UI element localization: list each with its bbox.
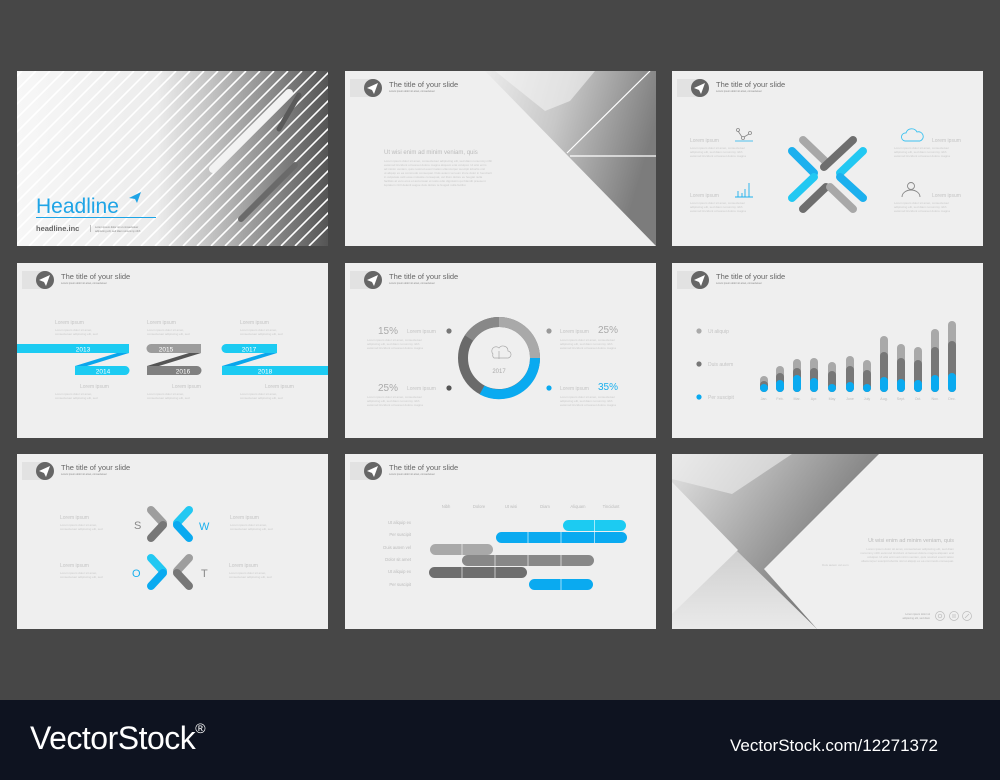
headline text: adipiscing elit, sed diam nonummy nibh [95,229,141,233]
header: Lorem ipsum dolor sit amet, consectetuer [389,90,435,93]
column labels: Aliquam [570,504,586,509]
column labels [442,504,620,509]
text blocks [690,138,961,213]
text blocks: Lorem ipsum dolor sit amet, [147,328,184,332]
legend: Per suscipit [708,395,734,401]
header: Lorem ipsum dolor sit amet, consectetuer [61,282,107,285]
column labels: Ut wisi [505,504,517,509]
text block: euismod tincidunt ut laoreet dolore magna aliquam erat volutpat. Ut wisi enim [384,163,487,167]
month labels: Oct. [915,397,921,401]
text blocks: Lorem ipsum [240,320,269,326]
footer bar: watermark: VectorStock® [30,720,205,756]
text block: luptatum zzril delenit augue duis dolore te feugait nulla facilisi. [384,183,466,187]
text blocks: consectetuer adipiscing elit, sed [55,332,98,336]
swot letters: T [201,568,208,580]
text blocks: Lorem ipsum [229,563,258,569]
text blocks: consectetuer adipiscing elit, sed [230,527,273,531]
text blocks: adipiscing elit, sed diam nonummy nibh [894,150,947,154]
header [350,462,458,480]
slide 8: gantt chart [345,454,656,629]
legend items: euismod tincidunt ut laoreet dolore magna [367,346,423,350]
month labels: June [846,397,854,401]
header [22,271,130,289]
legend items: adipiscing elit, sed diam nonummy nibh [560,342,613,346]
text blocks: euismod tincidunt ut laoreet dolore magna [894,154,950,158]
slide 7: SWOT [17,454,328,629]
text block: Duis autem vel eum [822,563,849,567]
row labels: Dolor sit amet [385,557,412,562]
text block: in vulputate velit esse molestie consequat, vel illum dolore eu feugiat nulla [384,175,483,179]
cross [792,140,863,209]
text blocks: Lorem ipsum [932,138,961,144]
slide 6: stacked bar chart [672,263,983,438]
header: Lorem ipsum dolor sit amet, consectetuer [389,473,435,476]
row labels: Per suscipit [389,532,412,537]
header: Lorem ipsum dolor sit amet, consectetuer [716,90,762,93]
text blocks: Lorem ipsum [690,138,719,144]
text blocks [60,515,273,579]
header: The title of your slide [716,272,785,281]
text blocks: consectetuer adipiscing elit, sed [147,396,190,400]
text blocks: euismod tincidunt ut laoreet dolore magna [894,209,950,213]
text block: Ut wisi enim ad minim veniam, quis [384,150,478,156]
donut [463,322,535,394]
text blocks: euismod tincidunt ut laoreet dolore magna [690,209,746,213]
text blocks: consectetuer adipiscing elit, sed [55,396,98,400]
legend items: Lorem ipsum [407,329,436,335]
slide 5: donut chart [345,263,656,438]
headline text [36,192,156,233]
text block: volutpat. Ut wisi enim ad minim veniam, quis nostrud exerci tation [867,555,954,559]
header [22,462,130,480]
month labels: Jan. [761,397,767,401]
text blocks: Lorem ipsum dolor sit amet, [229,571,266,575]
text blocks: consectetuer adipiscing elit, sed [229,575,272,579]
header [677,79,785,97]
slide 9: photo closing slide [672,454,983,629]
text blocks: Lorem ipsum [60,515,89,521]
legend items: 25% [378,383,398,394]
bars [760,321,956,392]
header: Lorem ipsum dolor sit amet, consectetuer [716,282,762,285]
text block: Lorem ipsum dolor sit amet, consectetuer adipiscing elit, sed diam nonummy nibh [384,159,493,163]
month labels: Aug. [880,397,888,401]
footer bar: watermark: VectorStock.com/12271372 [730,736,938,755]
legend items: Lorem ipsum dolor sit amet, consectetuer [367,395,422,399]
legend items: Lorem ipsum dolor sit amet, consectetuer [560,338,615,342]
text block: ullamcorper suscipit lobortis nisl ut aliquip ex ea commodo consequat. [861,559,954,563]
legend items: adipiscing elit, sed diam nonummy nibh [367,342,420,346]
legend items: adipiscing elit, sed diam nonummy nibh [367,399,420,403]
header [677,271,785,289]
ribbons: 2017 [242,346,257,354]
text block [384,150,493,187]
icon: bar chart [735,183,753,197]
legend items: Lorem ipsum dolor sit amet, consectetuer [367,338,422,342]
header: The title of your slide [61,272,130,281]
slide 3: cross diagram [672,71,983,246]
legend items: 25% [598,325,618,336]
text blocks: Lorem ipsum dolor sit amet, [240,328,277,332]
month labels: Dec. [948,397,956,401]
text blocks: consectetuer adipiscing elit, sed [60,575,103,579]
icon: cloud [901,129,923,141]
header: Lorem ipsum dolor sit amet, consectetuer [389,282,435,285]
text blocks: Lorem ipsum [265,384,294,390]
slide 4: timeline [17,263,328,438]
month labels: Apr. [811,397,817,401]
row labels: Ut aliquip ex [388,569,412,574]
text block [822,538,954,567]
text blocks: Lorem ipsum [690,193,719,199]
row labels [383,520,412,587]
ribbons: 2013 [76,346,91,354]
swot letters: S [134,520,141,532]
text block: ad minim veniam, quis nostrud exerci tation ullamcorper suscipit lobortis nisl [384,167,485,171]
text blocks: Lorem ipsum dolor sit amet, [240,392,277,396]
legend items: Lorem ipsum dolor sit amet, consectetuer [560,395,615,399]
text blocks: Lorem ipsum dolor sit amet, consectetuer [690,146,745,150]
text blocks: consectetuer adipiscing elit, sed [240,332,283,336]
ribbons: 2016 [176,368,191,376]
header [350,79,458,97]
legend: Ut aliquip [708,329,729,335]
legend items: adipiscing elit, sed diam nonummy nibh [560,399,613,403]
header: The title of your slide [61,463,130,472]
text blocks: Lorem ipsum dolor sit amet, [230,523,267,527]
bars [429,520,627,590]
icon: person [902,182,920,197]
text blocks: Lorem ipsum dolor sit amet, consectetuer [894,146,949,150]
ribbons [17,344,328,376]
legend: Duis autem [708,362,733,368]
swot letters: O [132,568,141,580]
text blocks: Lorem ipsum dolor sit amet, [60,571,97,575]
icon: network [735,128,753,141]
legend items: euismod tincidunt ut laoreet dolore magna [560,403,616,407]
text blocks: Lorem ipsum dolor sit amet, consectetuer [894,201,949,205]
column labels: Nibh [442,504,451,509]
month labels: Feb. [776,397,784,401]
month labels [761,397,956,401]
text blocks: euismod tincidunt ut laoreet dolore magna [690,154,746,158]
footer icons [902,612,972,620]
text blocks: Lorem ipsum [172,384,201,390]
month labels: May [829,397,836,401]
legend items: euismod tincidunt ut laoreet dolore magna [560,346,616,350]
text blocks: Lorem ipsum [60,563,89,569]
text block: facilisis at vero eros et accumsan et iusto odio dignissim qui blandit praesent [384,179,486,183]
text blocks: Lorem ipsum [932,193,961,199]
text blocks: Lorem ipsum [147,320,176,326]
column labels: Tincidunt [603,504,620,509]
ribbons: 2014 [96,368,111,376]
legend [696,328,734,401]
text blocks: Lorem ipsum dolor sit amet, consectetuer [690,201,745,205]
ribbons: 2018 [258,368,273,376]
header: The title of your slide [389,80,458,89]
month labels: July [864,397,870,401]
text blocks: Lorem ipsum dolor sit amet, [147,392,184,396]
column labels: Dolore [473,504,486,509]
text blocks: Lorem ipsum dolor sit amet, [55,392,92,396]
text blocks: consectetuer adipiscing elit, sed [147,332,190,336]
footer bar: watermark [0,700,1000,780]
text block: Lorem ipsum dolor sit amet, consectetuer adipiscing elit, sed diam [866,547,954,551]
footer icons: Lorem ipsum dolor sit [905,612,930,616]
legend items: 15% [378,326,398,337]
text blocks: Lorem ipsum dolor sit amet, [55,328,92,332]
legend items: Lorem ipsum [407,386,436,392]
row labels: Duis autem vel [383,545,411,550]
footer icons: adipiscing elit, sed diam [902,616,930,620]
text blocks: consectetuer adipiscing elit, sed [60,527,103,531]
month labels: Nov. [931,397,939,401]
text blocks: adipiscing elit, sed diam nonummy nibh [690,150,743,154]
legend items: 35% [598,382,618,393]
legend items: Lorem ipsum [560,386,589,392]
swot letters: W [199,521,210,533]
legend items: Lorem ipsum [560,329,589,335]
slide 1: headline cover [17,71,328,246]
header: The title of your slide [389,463,458,472]
slide 2: text with photo [345,71,656,246]
header: The title of your slide [389,272,458,281]
text blocks: Lorem ipsum [55,320,84,326]
swot chevrons [151,510,189,586]
text blocks: consectetuer adipiscing elit, sed [240,396,283,400]
ribbons: 2015 [159,346,174,354]
column labels: Diam [540,504,550,509]
legend items [367,325,618,407]
headline text: Lorem ipsum dolor sit ut consectetuer [95,225,138,229]
text block: ut aliquip ex ea commodo consequat. Duis autem vel eum iriure dolor in hendrerit [384,171,492,175]
text blocks [55,320,294,400]
text blocks: Lorem ipsum [230,515,259,521]
donut: 2017 [492,369,506,375]
header [350,271,458,289]
headline text: headline.inc [36,224,79,233]
swot letters [132,520,210,580]
text blocks: adipiscing elit, sed diam nonummy nibh [690,205,743,209]
text blocks: adipiscing elit, sed diam nonummy nibh [894,205,947,209]
text block: Ut wisi enim ad minim veniam, quis [868,538,954,544]
row labels: Per suscipit [389,582,412,587]
headline text: Headline [36,195,119,218]
legend items: euismod tincidunt ut laoreet dolore magna [367,403,423,407]
text blocks: Lorem ipsum [80,384,109,390]
text blocks: Lorem ipsum dolor sit amet, [60,523,97,527]
row labels: Ut aliquip ex [388,520,412,525]
header: Lorem ipsum dolor sit amet, consectetuer [61,473,107,476]
header: The title of your slide [716,80,785,89]
text block: nonummy nibh euismod tincidunt ut laoreet dolore magna aliquam erat [860,551,954,555]
month labels: Mar. [794,397,800,401]
month labels: Sept. [897,397,905,401]
